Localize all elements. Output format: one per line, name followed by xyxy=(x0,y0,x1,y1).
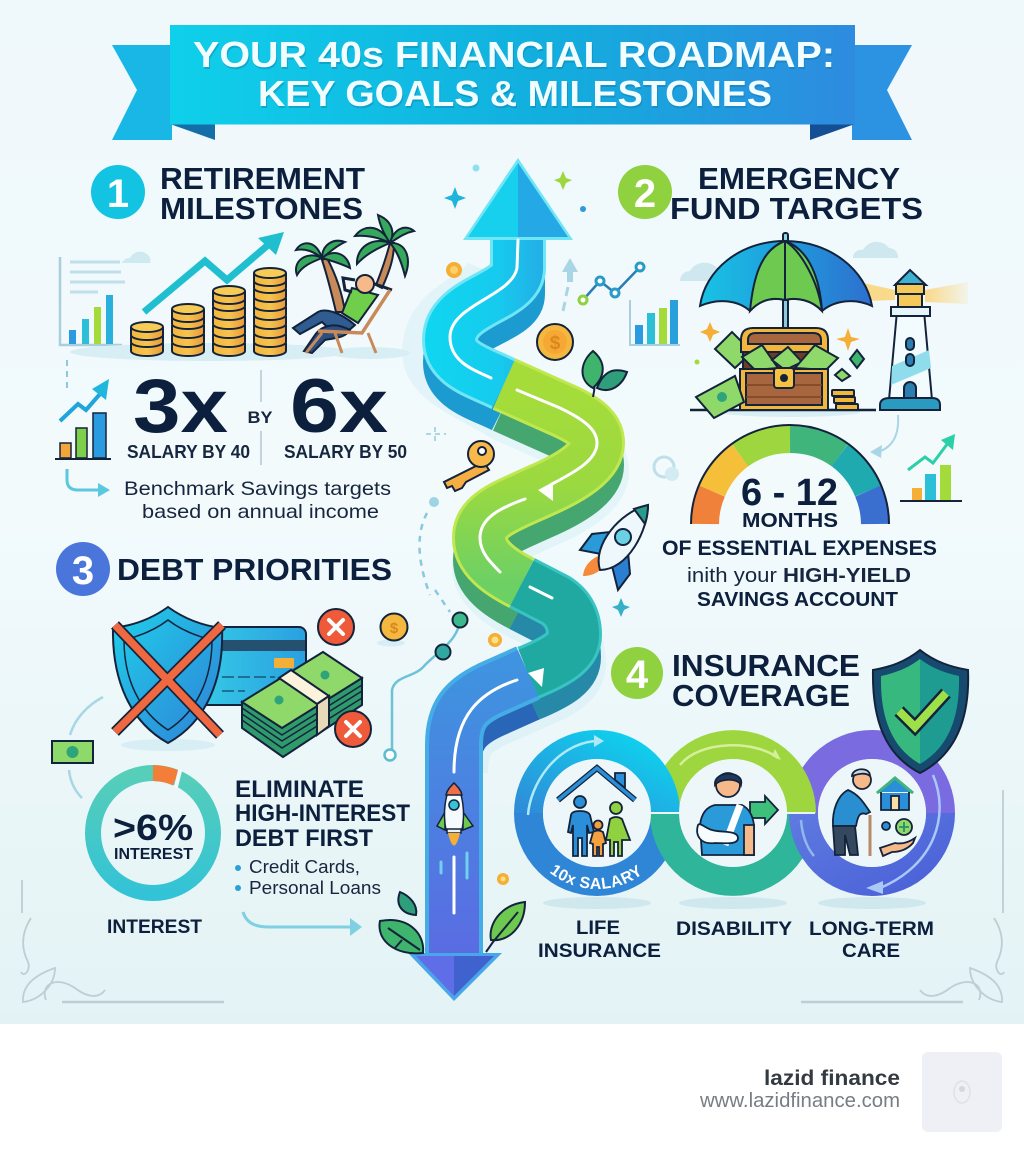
icon: stack of cash xyxy=(242,652,362,757)
stat: 6x salary by 50 xyxy=(284,364,407,462)
section 2 heading: FUND TARGETS xyxy=(670,191,923,226)
benchmark note xyxy=(124,478,391,523)
title text: KEY GOALS & MILESTONES xyxy=(259,75,773,116)
stat connector: by xyxy=(248,370,273,465)
icon: report chart xyxy=(60,252,150,345)
benchmark note: based on annual income xyxy=(142,501,379,523)
arrow head bottom xyxy=(408,953,502,1001)
gauge value xyxy=(741,472,838,532)
icon: clouds xyxy=(680,242,898,281)
section 4 heading: INSURANCE xyxy=(672,648,860,683)
stat: 3x salary by 40: SALARY BY 40 xyxy=(127,442,250,462)
debt priorities message: Personal Loans xyxy=(249,878,381,898)
icon: rocket xyxy=(580,505,648,590)
icon: treasure chest with cash xyxy=(690,322,876,418)
icon: small growth chart xyxy=(55,360,111,459)
debt priorities message: DEBT FIRST xyxy=(235,825,373,852)
emergency fund note xyxy=(662,536,937,611)
chart: interest donut: INTEREST xyxy=(114,846,194,863)
icon: family under roof xyxy=(558,768,635,856)
insurance labels: DISABILITY xyxy=(676,918,792,940)
insurance ring chain xyxy=(514,730,955,909)
section 1 heading: MILESTONES xyxy=(160,191,363,226)
icon: coin stacks xyxy=(70,268,350,361)
section 2 number badge xyxy=(618,165,672,219)
chart: interest donut xyxy=(93,773,213,893)
arrow: debt pointer xyxy=(243,912,362,936)
icon: banknote xyxy=(52,697,103,798)
footer background xyxy=(0,1024,1024,1154)
insurance labels: INSURANCE xyxy=(538,940,661,962)
central winding road arrow xyxy=(408,158,599,1001)
icon: rising trend arrow xyxy=(144,232,284,312)
debt priorities message: HIGH-INTEREST xyxy=(235,800,410,827)
icon: growth chart right xyxy=(900,434,962,501)
insurance labels xyxy=(538,917,934,962)
donut caption: INTEREST xyxy=(107,917,202,938)
debt priorities message xyxy=(235,776,410,898)
emergency fund note: OF ESSENTIAL EXPENSES xyxy=(662,536,937,560)
title banner xyxy=(112,25,912,140)
benchmark note: Benchmark Savings targets xyxy=(124,478,391,500)
icon: line graph xyxy=(579,263,644,304)
title text: YOUR 40s FINANCIAL ROADMAP: xyxy=(193,34,835,75)
insurance labels: LONG-TERM xyxy=(809,918,934,940)
icon: dollar coin: $ xyxy=(390,620,399,637)
icon: dollar coin xyxy=(377,614,408,646)
icon: gold coin: $ xyxy=(550,333,561,354)
section 1 heading xyxy=(160,161,365,226)
section 3 heading: DEBT PRIORITIES xyxy=(117,552,392,587)
icon: lighthouse beams xyxy=(863,282,968,304)
stat: 6x salary by 50: 6x xyxy=(290,364,388,449)
section 4 heading xyxy=(672,648,860,713)
icon: small dashed connector xyxy=(870,415,898,458)
icon: relaxing person under palm trees xyxy=(293,215,414,359)
icon: key xyxy=(444,441,494,491)
section 3 number badge: 3 xyxy=(72,549,94,593)
corner flourish left xyxy=(21,880,224,1002)
road centre lines xyxy=(441,240,597,913)
gauge value: MONTHS xyxy=(742,510,838,532)
stat: 3x salary by 40: 3x xyxy=(133,364,228,449)
icon: rocket on road xyxy=(437,783,473,846)
icon: small bar chart xyxy=(630,300,680,345)
section 1 number badge xyxy=(91,165,145,219)
icon: lighthouse xyxy=(880,270,940,410)
stat connector: by: BY xyxy=(248,408,273,427)
section 4 number badge xyxy=(611,647,663,699)
chart: interest donut: >6% xyxy=(113,807,193,848)
emergency fund note: SAVINGS ACCOUNT xyxy=(697,589,898,611)
decorative sparkles and coins around road xyxy=(420,164,679,885)
section 2 number badge: 2 xyxy=(634,172,656,216)
icon: crossed-out shield xyxy=(113,607,222,751)
road direction arrows xyxy=(528,482,553,687)
emergency fund note: inith your HIGH-YIELD xyxy=(687,565,911,587)
brand logo tile xyxy=(922,1052,1002,1132)
debt priorities message: Credit Cards, xyxy=(249,857,360,877)
connector nodes xyxy=(384,612,468,760)
icon: shield with check xyxy=(873,650,968,773)
brand url: www.lazidfinance.com xyxy=(699,1090,900,1112)
ring label: 10x salary: 10x SALARY xyxy=(550,864,640,889)
icon: umbrella xyxy=(700,233,872,330)
insurance labels: CARE xyxy=(842,940,900,962)
section 2 heading: EMERGENCY xyxy=(698,161,900,196)
stat: 3x salary by 40 xyxy=(127,364,250,462)
stat: 6x salary by 50: SALARY BY 50 xyxy=(284,442,407,462)
icon: leaf sprig xyxy=(582,351,627,397)
chart: emergency fund gauge xyxy=(691,425,889,524)
arrow head top xyxy=(463,158,573,240)
arrow: benchmark pointer xyxy=(67,469,110,497)
section 1 heading: RETIREMENT xyxy=(160,161,365,196)
icon: credit card xyxy=(200,627,306,705)
icon: elderly person with home care xyxy=(833,769,915,856)
section 4 number badge: 4 xyxy=(626,653,649,697)
section 2 heading xyxy=(670,161,923,226)
section 4 heading: COVERAGE xyxy=(672,678,850,713)
corner flourish right xyxy=(801,790,1004,1002)
icon: leaves xyxy=(379,892,525,953)
icon: person with arm sling xyxy=(697,773,778,855)
section 3 number badge xyxy=(56,542,110,596)
title text: YOUR 40s FINANCIAL ROADMAP: xyxy=(194,36,836,77)
debt priorities message: ELIMINATE xyxy=(235,776,364,803)
brand name: lazid finance xyxy=(764,1066,900,1090)
insurance labels: LIFE xyxy=(576,917,620,939)
section 1 number badge: 1 xyxy=(107,172,129,216)
title text: KEY GOALS & MILESTONES xyxy=(258,73,772,114)
icon: gold coin xyxy=(537,324,573,360)
title text xyxy=(193,34,836,116)
gauge value: 6 - 12 xyxy=(741,472,838,514)
icon: warning crosses xyxy=(318,609,371,747)
